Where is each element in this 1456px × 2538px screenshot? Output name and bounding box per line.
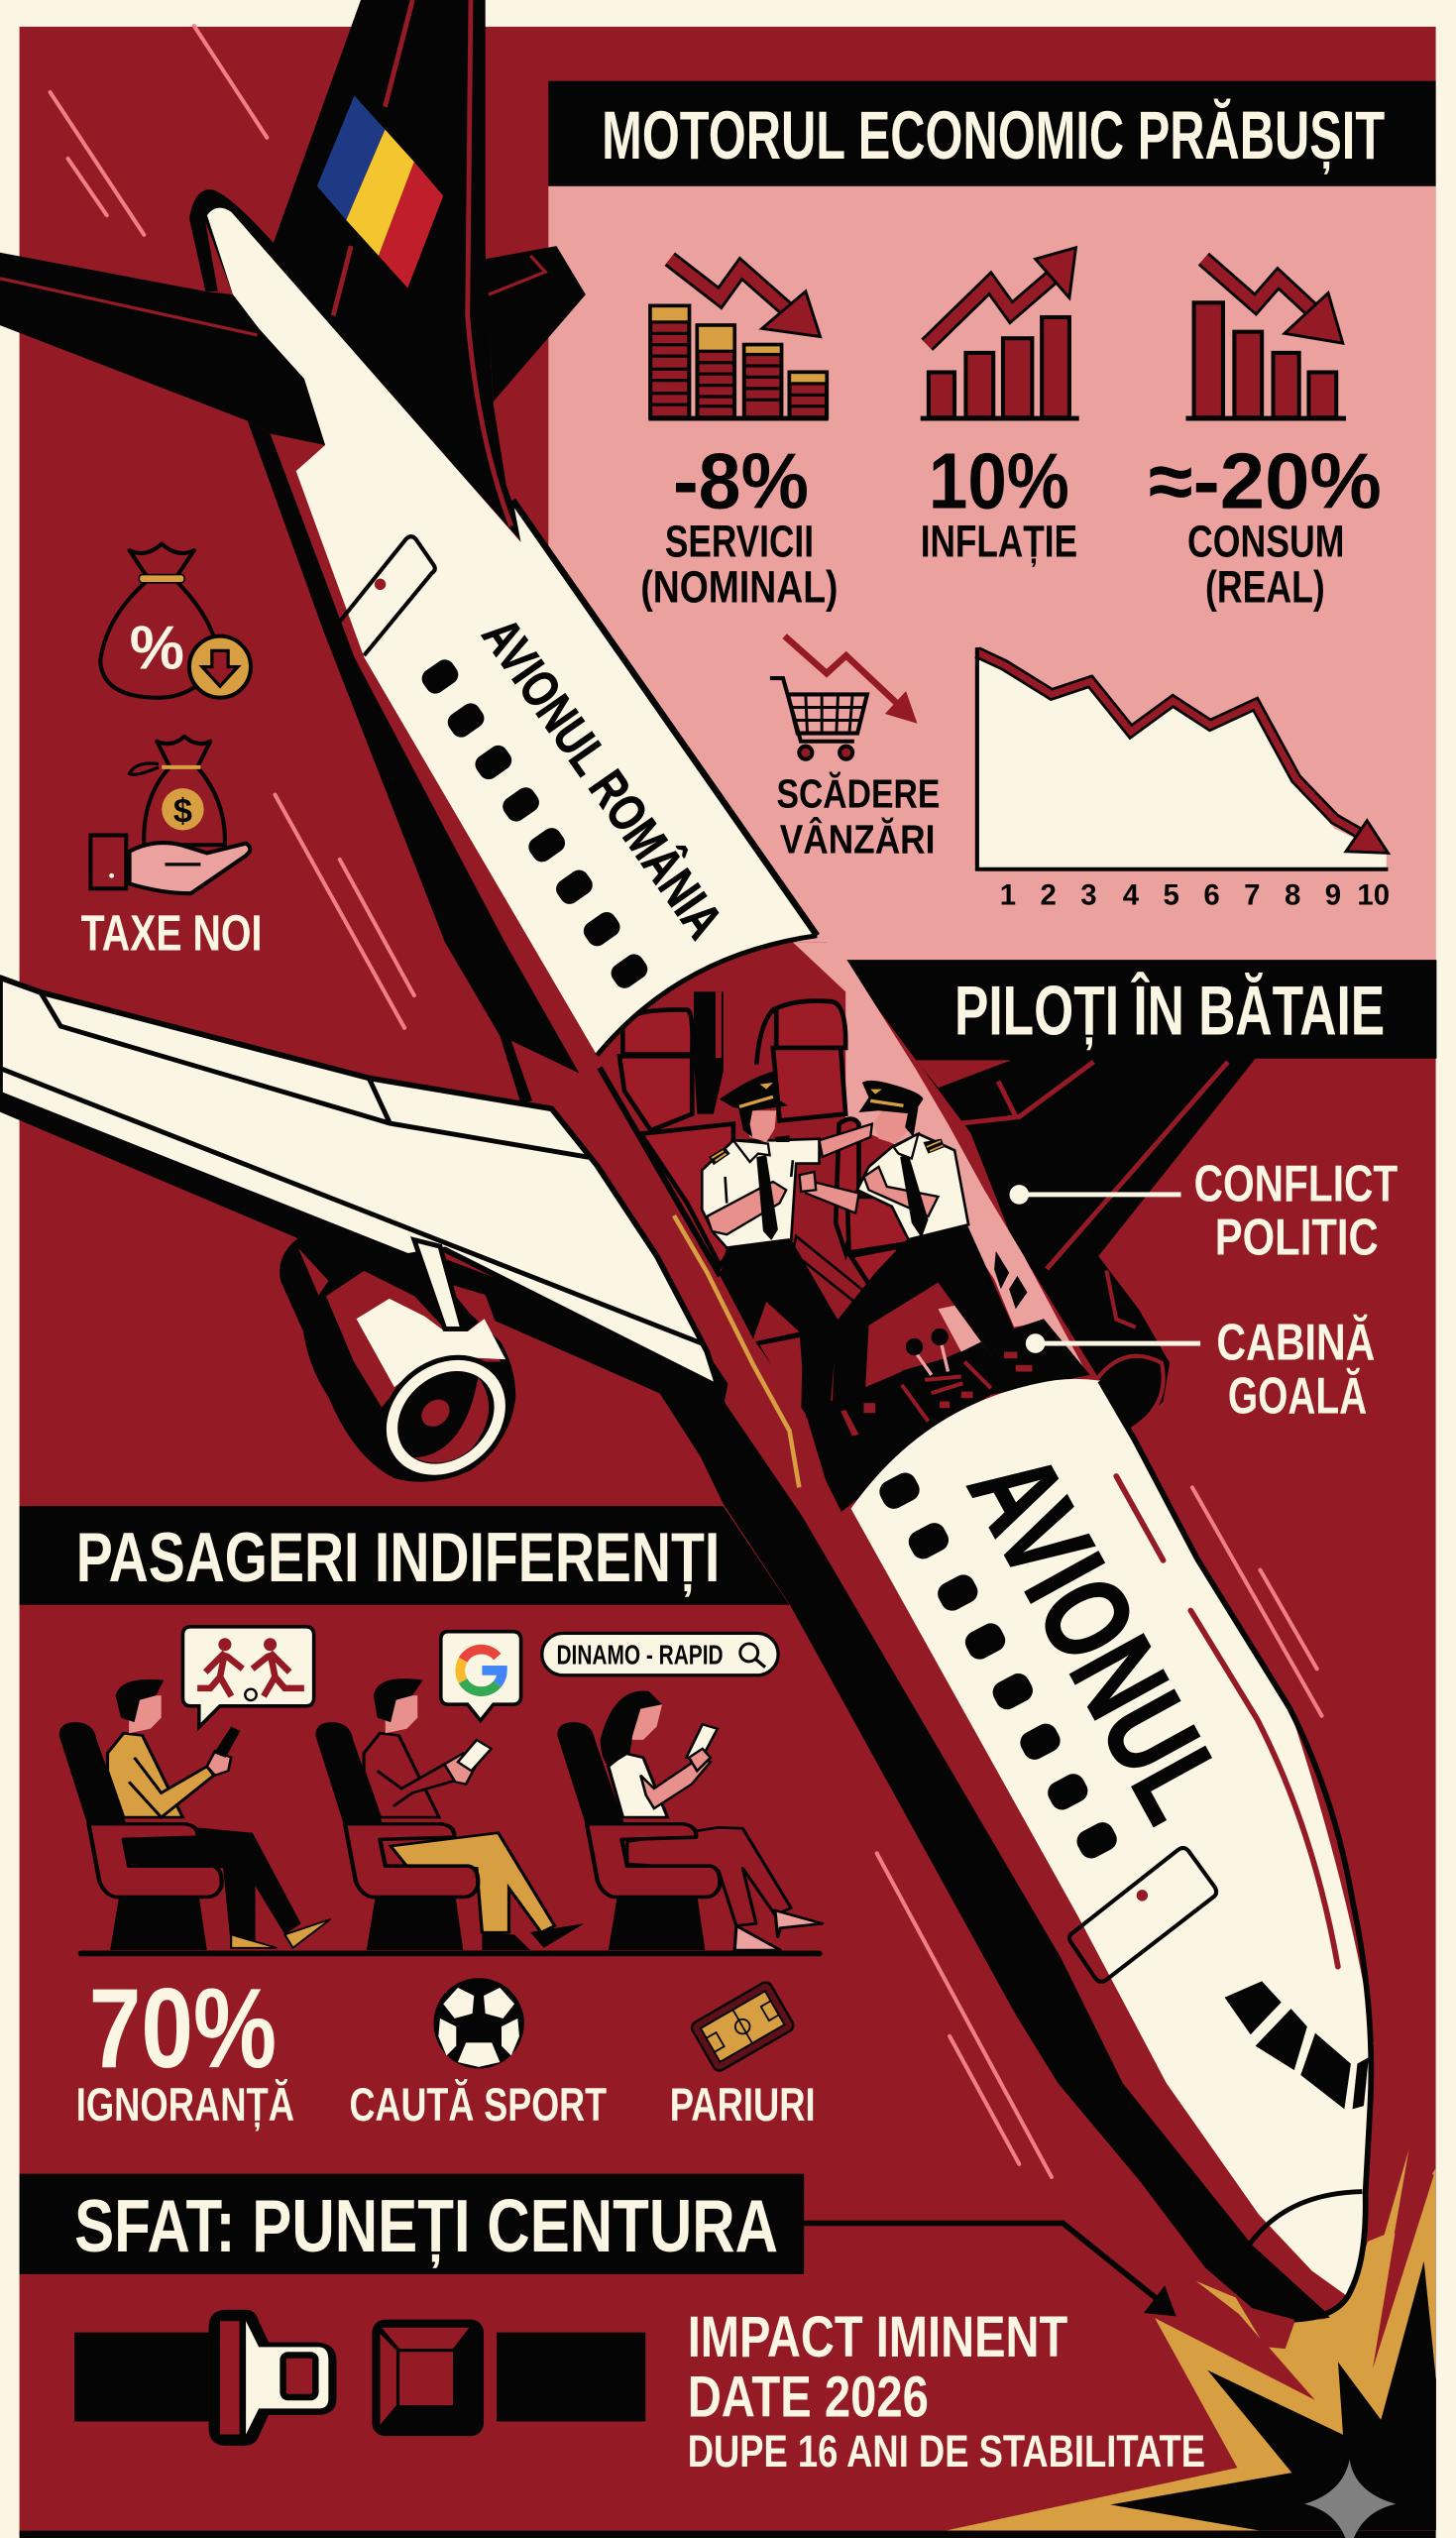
line chart: sales: 2: [1041, 879, 1057, 912]
black belly upper: [248, 420, 579, 1103]
stat: ignorance: IGNORANȚĂ: [76, 2078, 294, 2132]
pilot A: [702, 1071, 872, 1418]
speech bubble: Google: [441, 1632, 521, 1721]
icon: money bag with percent: [100, 544, 251, 698]
search pill: [542, 1633, 778, 1675]
stat: sports search: [350, 1978, 607, 2132]
callout: empty cockpit: CABINĂ: [1216, 1314, 1375, 1371]
gold scrape line: [674, 1215, 799, 1487]
icon: football: [433, 1978, 524, 2069]
heading: seatbelt advice: SFAT: PUNEȚI CENTURA: [74, 2184, 778, 2268]
stat: ignorance: 70%: [89, 1966, 277, 2092]
impact text: [688, 2305, 1205, 2477]
line chart: sales: 10: [1357, 879, 1390, 912]
passenger 2: [315, 1678, 584, 1950]
cockpit floor and console: [721, 1243, 1090, 1512]
icon: hand with money bag: [90, 737, 250, 893]
stat: services: [640, 437, 838, 612]
line chart: sales: 3: [1080, 879, 1097, 912]
callout: political conflict: [1010, 1155, 1398, 1266]
line chart: sales: 8: [1285, 879, 1300, 912]
seats: [619, 1000, 912, 1289]
cabin left border and fuselage windows: [600, 1068, 721, 1276]
line chart: sales: 4: [1123, 879, 1140, 912]
big fuselage name: AVIONUL: [944, 1432, 1252, 1841]
cabin scene: pilots fighting: [597, 942, 1398, 1512]
right tailplane: [486, 246, 586, 402]
line chart: sales: 9: [1325, 879, 1341, 912]
speed lines: [51, 26, 1322, 2177]
icon: betting ticket: [690, 1980, 796, 2073]
label: sales drop: SCĂDERE: [776, 771, 940, 817]
arrow: to impact: [804, 2223, 1176, 2316]
chart icon: services falling: [649, 259, 829, 420]
callout: political conflict: POLITIC: [1215, 1209, 1379, 1266]
label: new taxes: TAXE NOI: [81, 904, 262, 961]
windows: [418, 655, 651, 992]
passenger 1: [59, 1679, 330, 1950]
buckle tongue: [209, 2310, 337, 2446]
windshield: [1225, 1981, 1369, 2109]
callout: empty cockpit: [1026, 1314, 1375, 1425]
impact text: DUPE 16 ANI DE STABILITATE: [688, 2426, 1205, 2477]
callout: empty cockpit: GOALĂ: [1228, 1367, 1367, 1425]
bottom black strip: [20, 2531, 1436, 2538]
windows: [875, 1469, 1121, 1862]
heading: indifferent passengers: [20, 1506, 790, 1605]
near wing and engine: [0, 978, 728, 1502]
line chart: sales: 6: [1203, 879, 1220, 912]
label: sales drop: VÂNZĂRI: [780, 816, 935, 862]
line chart: sales: 5: [1164, 879, 1179, 912]
fuselage rear section: [207, 208, 817, 1055]
stat: services: (NOMINAL): [640, 561, 838, 612]
stat: services: SERVICII: [665, 517, 814, 567]
heading: seatbelt advice: [20, 2174, 804, 2274]
stat: inflation: 10%: [929, 437, 1069, 525]
black belly lower: [657, 1376, 1330, 2320]
far wing and engine: [841, 960, 1436, 1433]
explosion: [947, 2149, 1436, 2538]
icon: Romanian flag: [317, 95, 443, 288]
stat: ignorance: [76, 1966, 294, 2132]
tail fin: [189, 0, 529, 550]
speech bubble: football players: [182, 1627, 314, 1727]
icon: hand with money bag: $: [173, 792, 192, 830]
fuselage name: AVIONUL ROMÂNIA: [471, 608, 733, 949]
pink light strip: [793, 942, 1086, 1378]
fuselage front section: [851, 1379, 1374, 2320]
panel: economic engine: [548, 81, 1436, 963]
passengers row: [59, 1627, 823, 1956]
impact text: IMPACT IMINENT: [688, 2305, 1067, 2369]
stat: consumption: (REAL): [1205, 561, 1325, 612]
heading: economic engine: [548, 81, 1436, 186]
label: sales drop: [776, 771, 940, 862]
callout: political conflict: CONFLICT: [1194, 1155, 1398, 1212]
search pill: DINAMO - RAPID: [556, 1639, 724, 1670]
buckle receiver: [372, 2320, 484, 2436]
line chart: sales: 1: [1000, 879, 1016, 912]
line chart: sales: 7: [1244, 879, 1261, 912]
stat: services: -8%: [673, 437, 809, 525]
pilot B: [800, 1081, 1014, 1402]
stat: betting: [670, 1980, 816, 2132]
stat: inflation: [921, 437, 1077, 568]
door: [340, 536, 435, 655]
stat: consumption: [1149, 437, 1382, 612]
left tailplane: [0, 253, 325, 445]
door: [1069, 1848, 1216, 1982]
stat: inflation: INFLAȚIE: [921, 517, 1077, 568]
stat: consumption: CONSUM: [1187, 517, 1344, 567]
chart icon: consumption falling: [1185, 259, 1346, 420]
stat: sports search: CAUTĂ SPORT: [350, 2078, 607, 2132]
line chart: sales: [977, 647, 1390, 912]
icon: money bag with percent: %: [130, 614, 184, 682]
seatbelt: [74, 2310, 645, 2446]
chart icon: inflation rising: [921, 248, 1079, 420]
impact text: DATE 2026: [688, 2365, 929, 2430]
icon: shopping cart with falling arrow: [770, 636, 917, 759]
engine: [280, 1238, 532, 1502]
heading: indifferent passengers: PASAGERI INDIFERENȚI: [76, 1518, 720, 1597]
stat: betting: PARIURI: [670, 2079, 816, 2132]
passenger 3: [557, 1690, 823, 1950]
stat: consumption: ≈-20%: [1149, 437, 1382, 525]
